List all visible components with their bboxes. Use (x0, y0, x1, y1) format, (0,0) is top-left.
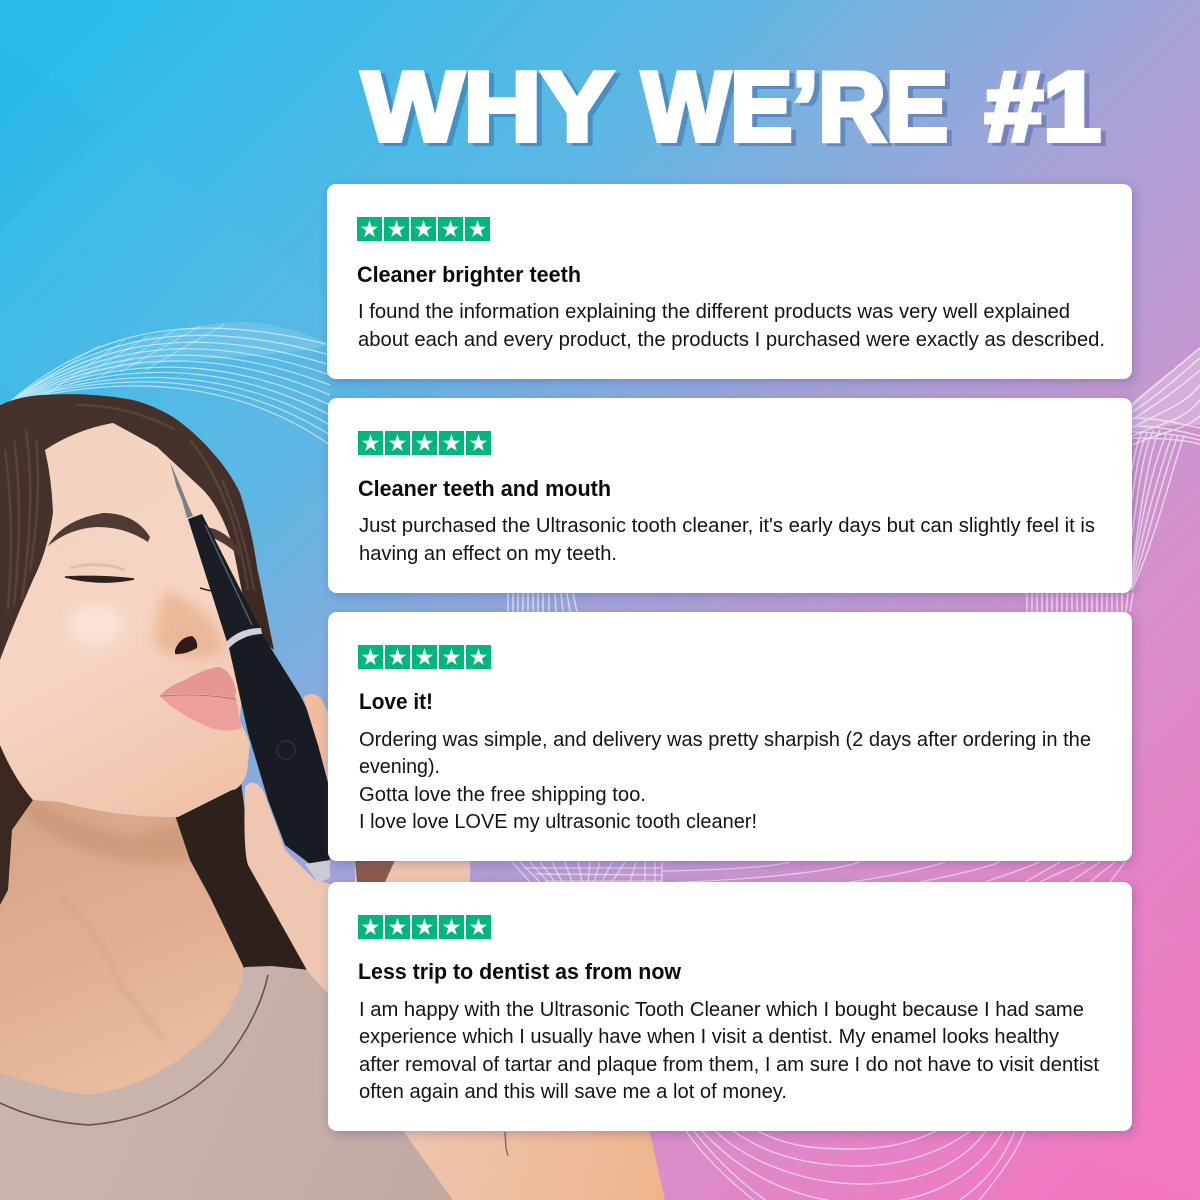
review heading: Less trip to dentist as from now (358, 959, 682, 984)
review card 4 (328, 882, 1132, 1131)
review text (359, 515, 1095, 565)
title (362, 52, 1101, 162)
closed eye (65, 576, 134, 582)
review text (359, 999, 1099, 1103)
card background (328, 612, 1132, 861)
review text: Just purchased the Ultrasonic tooth cleaner, it's early days but can slightly feel it is (359, 515, 1095, 537)
star rating (358, 431, 491, 455)
soft-touch handle (229, 634, 330, 865)
collarbone shading (60, 900, 165, 1040)
review text: after removal of tartar and plaque from them, I am sure I do not have to visit dentist (359, 1054, 1099, 1076)
metal tip (170, 462, 193, 518)
neck and chest (0, 740, 245, 1110)
collar edge (0, 975, 268, 1125)
review text: I love love LOVE my ultrasonic tooth cleaner! (359, 811, 757, 833)
face (0, 423, 250, 817)
review text: having an effect on my teeth. (359, 543, 617, 565)
wave lines: bottom arcs (686, 1131, 1025, 1200)
wave lines: gap below third card (512, 862, 1125, 883)
mouth line (160, 695, 236, 699)
woman with ultrasonic tooth cleaner (0, 394, 665, 1200)
review heading: Cleaner teeth and mouth (358, 476, 611, 501)
nose shading (153, 590, 225, 659)
star rating (357, 217, 490, 241)
title: #1 (985, 52, 1101, 162)
review text: I am happy with the Ultrasonic Tooth Cleaner which I bought because I had same (359, 999, 1084, 1021)
right eyebrow (207, 527, 241, 556)
review heading: Love it! (359, 689, 433, 714)
shadow between fingers (355, 860, 395, 882)
review card 1 (327, 184, 1132, 379)
hair highlights (5, 405, 254, 610)
lower lip (160, 696, 242, 731)
card background (327, 184, 1132, 379)
card background (328, 882, 1132, 1131)
review text: evening). (359, 756, 440, 778)
lips (160, 667, 242, 731)
tattoo (505, 1132, 508, 1156)
device base (305, 860, 330, 883)
arm (395, 1120, 665, 1200)
hair behind the neck (175, 775, 310, 972)
review text (359, 729, 1091, 833)
review text: about each and every product, the products I purchased were exactly as described. (358, 329, 1105, 351)
power button (277, 741, 295, 759)
review heading: Cleaner brighter teeth (357, 262, 581, 287)
star rating (358, 915, 491, 939)
review card 2 (328, 398, 1132, 593)
wave lines: gap below second card (508, 593, 1133, 612)
review card 3 (328, 612, 1132, 861)
shirt (0, 966, 453, 1200)
review text: Gotta love the free shipping too. (359, 784, 646, 806)
cheek shine (69, 605, 121, 645)
upper lip (160, 667, 236, 698)
title: WHY (362, 52, 613, 162)
slim black shaft (188, 514, 261, 642)
wave band: top left (0, 322, 330, 445)
shaft highlight (205, 525, 252, 625)
lower left hair lock (0, 745, 33, 905)
review text: I found the information explaining the different products was very well explained (358, 301, 1070, 323)
fingers between the cards (355, 860, 470, 882)
card background (328, 398, 1132, 593)
wave band: right side (1132, 347, 1200, 590)
title: WE’RE (642, 52, 948, 162)
eyelid crease (70, 564, 125, 570)
review text (358, 301, 1105, 351)
silver ring (226, 628, 262, 648)
nostril (175, 636, 197, 654)
review text: often again and this will save me a lot of money. (359, 1081, 787, 1103)
left eyebrow (48, 513, 150, 546)
finger behind the device (303, 694, 330, 790)
star rating (358, 645, 491, 669)
raised hand (244, 783, 330, 996)
neck shading (20, 800, 195, 864)
tooth cleaner device (170, 462, 330, 883)
review text: Ordering was simple, and delivery was pretty sharpish (2 days after ordering in the (359, 729, 1091, 751)
right eye (200, 588, 212, 591)
hair top (0, 394, 274, 660)
review text: experience which I usually have when I visit a dentist. My enamel looks healthy (359, 1026, 1059, 1048)
shirt collar (0, 967, 268, 1125)
